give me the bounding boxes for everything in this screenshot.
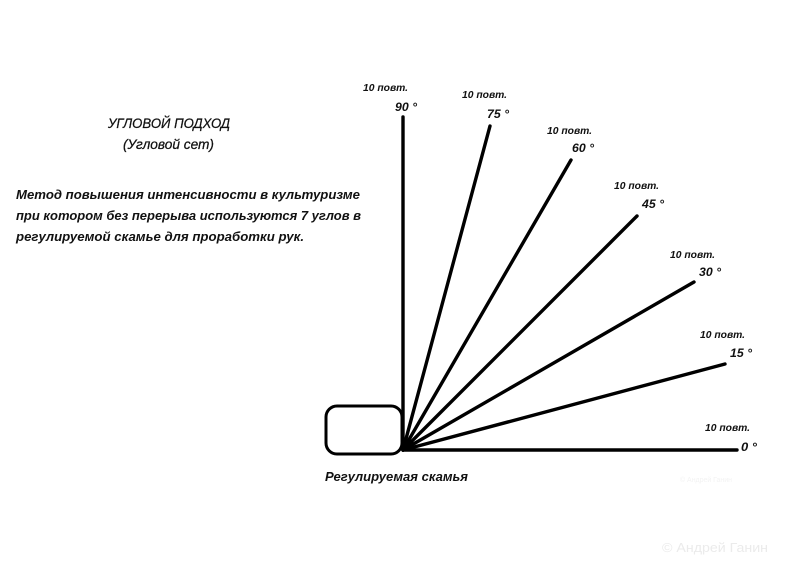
line: 45 degrees <box>403 216 637 450</box>
angle lines fan <box>403 117 737 450</box>
label: 30 degrees <box>670 249 721 279</box>
label: 15 degrees: 15 ° <box>730 346 752 360</box>
label: 0 degrees <box>705 422 757 454</box>
line: 90 degrees <box>401 117 405 450</box>
label: 75 degrees: 75 ° <box>487 107 509 121</box>
description text: регулируемой скамье для проработки рук. <box>15 229 304 244</box>
label: 75 degrees <box>462 89 509 121</box>
watermark: small: © Андрей Ганин <box>680 476 732 484</box>
description text: Метод повышения интенсивности в культуризме <box>16 187 360 202</box>
line: 15 degrees <box>403 364 725 450</box>
line: 0 degrees <box>403 448 737 452</box>
watermark: author: © Андрей Ганин <box>662 540 768 555</box>
bench label: Регулируемая скамья <box>325 469 468 484</box>
label: 60 degrees: 10 повт. <box>547 125 592 137</box>
label: 45 degrees <box>614 180 664 211</box>
subtitle: (Угловой сет) <box>123 137 214 152</box>
label: 75 degrees: 10 повт. <box>462 89 507 101</box>
line: 30 degrees <box>403 282 694 450</box>
label: 90 degrees <box>363 82 417 114</box>
label: 30 degrees: 10 повт. <box>670 249 715 261</box>
label: 45 degrees: 45 ° <box>641 197 664 211</box>
label: 90 degrees: 90 ° <box>395 100 417 114</box>
description text: при котором без перерыва используются 7 углов в <box>16 208 361 223</box>
label: 90 degrees: 10 повт. <box>363 82 408 94</box>
line: 75 degrees <box>403 126 490 450</box>
label: 0 degrees: 10 повт. <box>705 422 750 434</box>
label: 45 degrees: 10 повт. <box>614 180 659 192</box>
description text <box>15 187 361 244</box>
label: 60 degrees <box>547 125 594 155</box>
label: 0 degrees: 0 ° <box>741 440 757 454</box>
label: 15 degrees: 10 повт. <box>700 329 745 341</box>
icon: adjustable bench <box>326 406 402 454</box>
line: 60 degrees <box>403 160 571 450</box>
label: 30 degrees: 30 ° <box>699 265 721 279</box>
label: 15 degrees <box>700 329 752 360</box>
label: 60 degrees: 60 ° <box>572 141 594 155</box>
title: УГЛОВОЙ ПОДХОД <box>107 115 230 131</box>
